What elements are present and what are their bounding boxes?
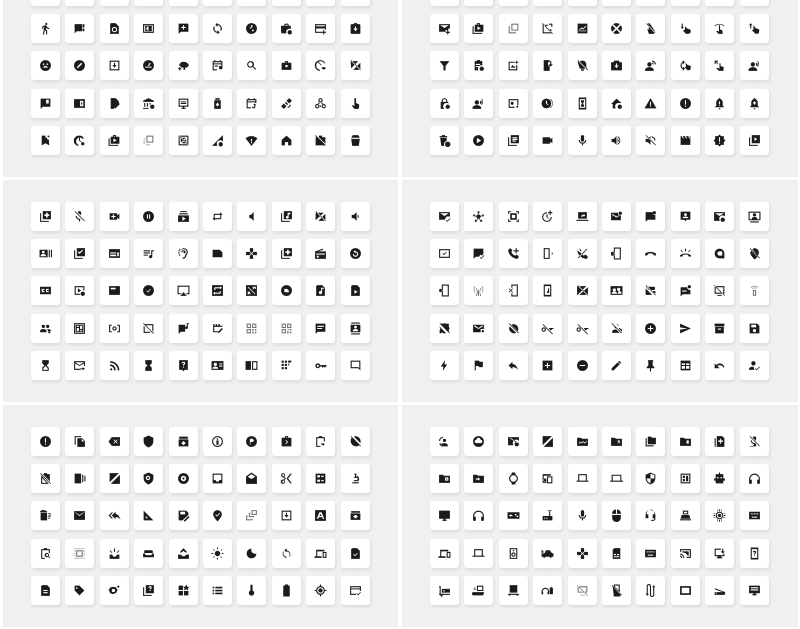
panel: icons set 3 xyxy=(3,180,398,402)
icon: document play xyxy=(341,276,370,305)
icon: replay circle xyxy=(341,239,370,268)
icon: folder badge xyxy=(671,427,700,456)
icon: microscope xyxy=(341,464,370,493)
icon: add circle xyxy=(636,314,665,343)
icon: error xyxy=(31,427,60,456)
panel: icons set 5 xyxy=(3,405,398,627)
icon: laptop share xyxy=(568,202,597,231)
icon: mobile off xyxy=(602,576,631,605)
icon: monitor contrast xyxy=(134,14,163,43)
icon: my location xyxy=(306,576,335,605)
icon: mail notification xyxy=(602,202,631,231)
icon: folder arrow xyxy=(464,464,493,493)
icon: clipboard arrow xyxy=(306,427,335,456)
icon: circle arrow xyxy=(272,276,301,305)
icon: smart toy xyxy=(705,464,734,493)
icon: camera switch person xyxy=(430,427,459,456)
icon: call end xyxy=(636,239,665,268)
icon: battery xyxy=(272,576,301,605)
icon: clapper edit xyxy=(203,314,232,343)
icon: radio tower xyxy=(464,276,493,305)
icon: person waves xyxy=(636,51,665,80)
icon: calendar repeat xyxy=(237,89,266,118)
icon: person voice xyxy=(464,89,493,118)
icon: swipe vertical xyxy=(740,14,769,43)
icon: phone gear xyxy=(430,276,459,305)
icon: gear sparkle xyxy=(100,576,129,605)
icon: send xyxy=(671,314,700,343)
icon: toy car xyxy=(533,539,562,568)
icon: download box xyxy=(272,501,301,530)
icon: bell alert xyxy=(705,89,734,118)
icon: hourglass full xyxy=(134,351,163,380)
icon: headset xyxy=(464,501,493,530)
icon: folder chart xyxy=(568,427,597,456)
icon: error xyxy=(671,89,700,118)
icon: globe xyxy=(237,14,266,43)
icon: photo frame spark xyxy=(499,89,528,118)
icon: fullscreen frame xyxy=(499,202,528,231)
icon: phone exit xyxy=(602,239,631,268)
icon: inventory box xyxy=(169,427,198,456)
icon: mic off xyxy=(65,202,94,231)
icon: person check xyxy=(740,351,769,380)
icon: duo xyxy=(705,239,734,268)
icon: video settings xyxy=(65,276,94,305)
icon: key xyxy=(306,351,335,380)
icon: dialpad xyxy=(272,351,301,380)
icon: chat check xyxy=(464,239,493,268)
icon: person voice xyxy=(740,51,769,80)
icon: mail dot xyxy=(464,314,493,343)
icon: push pin xyxy=(636,351,665,380)
icon: file copy xyxy=(65,427,94,456)
icon: mic xyxy=(568,501,597,530)
icon: screen off xyxy=(568,276,597,305)
icon: laptop wide xyxy=(602,464,631,493)
icon: repeat xyxy=(203,202,232,231)
icon: library add xyxy=(31,202,60,231)
icon: crop off xyxy=(533,14,562,43)
icon: work with gear xyxy=(272,14,301,43)
icon: email xyxy=(65,501,94,530)
icon: watch xyxy=(499,464,528,493)
icon: book xyxy=(237,351,266,380)
icon: search xyxy=(237,51,266,80)
icon: urn xyxy=(341,126,370,155)
panel: icons set 2 xyxy=(402,0,798,177)
icon: folder number xyxy=(602,427,631,456)
icon: shield xyxy=(134,427,163,456)
icon: home xyxy=(272,126,301,155)
icon: movie xyxy=(671,126,700,155)
icon: work arrow xyxy=(272,427,301,456)
icon: location check xyxy=(203,501,232,530)
icon: folders xyxy=(636,427,665,456)
icon: phone side xyxy=(65,464,94,493)
icon: phone off xyxy=(568,239,597,268)
icon: tray triangle xyxy=(169,539,198,568)
icon: open mail xyxy=(237,464,266,493)
icon: circle off xyxy=(341,427,370,456)
icon: folder badge xyxy=(430,464,459,493)
icon: gauge eye xyxy=(306,51,335,80)
icon: braces camera xyxy=(100,314,129,343)
icon: hub xyxy=(464,202,493,231)
icon: swipe up xyxy=(705,14,734,43)
icon: speed gauge xyxy=(134,51,163,80)
icon: cloud circle xyxy=(464,427,493,456)
icon: circle check xyxy=(134,276,163,305)
icon: list xyxy=(203,576,232,605)
icon: cable xyxy=(636,576,665,605)
icon: disc xyxy=(169,464,198,493)
icon: ring volume xyxy=(671,239,700,268)
icon: loop xyxy=(272,539,301,568)
icon: camera download xyxy=(602,51,631,80)
icon: save edit xyxy=(169,501,198,530)
icon: videocam xyxy=(533,126,562,155)
icon: chat image xyxy=(671,276,700,305)
icon: analytics xyxy=(568,14,597,43)
icon: reply all xyxy=(100,501,129,530)
icon: bookmark flag xyxy=(31,126,60,155)
icon: image slash xyxy=(533,427,562,456)
icon: headphones xyxy=(740,464,769,493)
icon: tablet xyxy=(671,576,700,605)
cropped top tile row xyxy=(31,0,372,8)
icon: sofa xyxy=(134,539,163,568)
icon: phone audio xyxy=(533,276,562,305)
icon: event repeat xyxy=(203,51,232,80)
icon: set square xyxy=(134,501,163,530)
icon: reply xyxy=(499,351,528,380)
icon: remote wifi xyxy=(740,276,769,305)
icon: gamepad xyxy=(568,539,597,568)
icon: inbox xyxy=(203,464,232,493)
icon: flag circle xyxy=(237,427,266,456)
icon: stacked images xyxy=(237,501,266,530)
icon: router xyxy=(533,501,562,530)
icon: security search xyxy=(134,464,163,493)
icon: desktop off xyxy=(568,576,597,605)
icon: mail add xyxy=(430,14,459,43)
icon: clock arc xyxy=(533,89,562,118)
icon: cast connected xyxy=(671,539,700,568)
icon: phone question xyxy=(740,539,769,568)
icon: laptop xyxy=(568,464,597,493)
icon: work play stack xyxy=(464,14,493,43)
icon: tag xyxy=(65,576,94,605)
icon: bottle xyxy=(203,89,232,118)
icon: radio xyxy=(306,239,335,268)
icon: table view xyxy=(671,351,700,380)
icon: swipe down xyxy=(671,14,700,43)
icon: contact video xyxy=(602,276,631,305)
icon: chat outline xyxy=(341,351,370,380)
icon: moon xyxy=(237,539,266,568)
icon: library check xyxy=(65,239,94,268)
icon: calendar check xyxy=(430,239,459,268)
icon: filter xyxy=(430,51,459,80)
panel: icons set 6 xyxy=(402,405,798,627)
icon: circle pen xyxy=(65,51,94,80)
icon: chip grid xyxy=(671,464,700,493)
icon: person off xyxy=(602,314,631,343)
icon: shuffle on xyxy=(237,276,266,305)
icon: devices xyxy=(306,539,335,568)
icon: wifi alert xyxy=(237,126,266,155)
icon: edit xyxy=(602,351,631,380)
icon: video library xyxy=(740,126,769,155)
icon: cloud add xyxy=(169,51,198,80)
icon: rotate hand xyxy=(671,51,700,80)
icon: alarm off xyxy=(499,314,528,343)
icon: library books xyxy=(499,126,528,155)
icon: mail send xyxy=(65,351,94,380)
icon: description xyxy=(31,576,60,605)
icon: warning xyxy=(636,89,665,118)
icon: document check xyxy=(341,539,370,568)
icon: rss feed xyxy=(100,351,129,380)
icon: signal gear xyxy=(203,126,232,155)
icon: newspaper panel xyxy=(65,89,94,118)
icon: delete clock xyxy=(430,126,459,155)
icon: running person xyxy=(31,14,60,43)
icon: play circle xyxy=(464,126,493,155)
icon: quiz xyxy=(134,576,163,605)
icon: flag xyxy=(464,351,493,380)
icon: keyboard xyxy=(636,539,665,568)
icon: save xyxy=(740,314,769,343)
panel: icons set 1 xyxy=(3,0,398,177)
icon: repeat on xyxy=(203,276,232,305)
icon: scanner xyxy=(464,576,493,605)
icon: lock gear xyxy=(430,89,459,118)
icon: clock gear xyxy=(65,126,94,155)
icon: phone hourglass xyxy=(568,89,597,118)
icon: volume down xyxy=(341,202,370,231)
icon: medical box xyxy=(341,501,370,530)
icon: presenter xyxy=(740,202,769,231)
icon: chat notification xyxy=(636,202,665,231)
icon: phone close xyxy=(499,276,528,305)
icon: work off xyxy=(306,126,335,155)
icon: undo xyxy=(705,351,734,380)
icon: devices xyxy=(430,539,459,568)
icon: qr code xyxy=(237,314,266,343)
icon: sim card refresh xyxy=(100,14,129,43)
icon: image off xyxy=(341,51,370,80)
icon: briefcase xyxy=(272,51,301,80)
icon: question bubble xyxy=(169,351,198,380)
icon: bell add xyxy=(740,89,769,118)
icon: add to photos xyxy=(272,239,301,268)
icon: game controller xyxy=(499,501,528,530)
icon: headphones battery xyxy=(533,576,562,605)
icon: stop screen xyxy=(705,276,734,305)
icon: image slash xyxy=(100,464,129,493)
icon: cart xyxy=(430,576,459,605)
icon: list panels xyxy=(306,464,335,493)
icon: bank gear xyxy=(134,89,163,118)
icon: brightness xyxy=(203,539,232,568)
icon: add box xyxy=(533,351,562,380)
icon: frame off xyxy=(169,126,198,155)
icon: document edit xyxy=(100,89,129,118)
icon: webhook xyxy=(306,89,335,118)
icon: meeting off xyxy=(636,276,665,305)
icon: assignment gear xyxy=(464,51,493,80)
icon: subscriptions xyxy=(169,202,198,231)
icon: pause circle xyxy=(134,202,163,231)
icon: tv xyxy=(430,501,459,530)
icon: volume mute xyxy=(237,202,266,231)
icon: hearing xyxy=(169,239,198,268)
icon: bell off xyxy=(568,51,597,80)
icon: qr code dense xyxy=(272,314,301,343)
icon: letter A box xyxy=(306,501,335,530)
icon: scissors xyxy=(272,464,301,493)
icon: person bubble xyxy=(671,202,700,231)
icon: headset mic xyxy=(636,501,665,530)
icon: key off xyxy=(533,314,562,343)
icon: assignment search xyxy=(31,539,60,568)
icon: pinch hand xyxy=(705,51,734,80)
icon: bolt xyxy=(430,351,459,380)
icon: closed captions xyxy=(31,276,60,305)
icon: flip to front xyxy=(134,126,163,155)
icon: framed tiles xyxy=(65,314,94,343)
icon: tap off xyxy=(636,14,665,43)
icon: groups xyxy=(31,314,60,343)
cropped top tile row xyxy=(430,0,770,8)
icon: mail off gear xyxy=(499,427,528,456)
icon: video off xyxy=(306,202,335,231)
icon: backspace xyxy=(100,427,129,456)
icon: photo spark xyxy=(499,51,528,80)
icon: flatbed scanner xyxy=(705,576,734,605)
icon: tab window xyxy=(100,276,129,305)
icon: apps star xyxy=(169,576,198,605)
icon: add call xyxy=(499,239,528,268)
icon: chat with side panel xyxy=(65,14,94,43)
icon: satellite xyxy=(272,89,301,118)
icon: chip circle xyxy=(705,501,734,530)
icon: install desktop xyxy=(705,539,734,568)
icon: mouse xyxy=(602,501,631,530)
icon: circle cross xyxy=(602,14,631,43)
icon: recent actors xyxy=(31,239,60,268)
icon: library music xyxy=(272,202,301,231)
icon: queue music xyxy=(134,239,163,268)
icon: medical bag download xyxy=(341,14,370,43)
icon: note xyxy=(203,239,232,268)
icon: circle person xyxy=(203,427,232,456)
icon: delete list xyxy=(31,501,60,530)
icon: memory chip xyxy=(65,539,94,568)
icon: music document xyxy=(306,276,335,305)
icon: house gear xyxy=(602,89,631,118)
icon: thermometer xyxy=(237,576,266,605)
icon: video add xyxy=(100,202,129,231)
icon: chat xyxy=(306,314,335,343)
icon: touch app xyxy=(341,89,370,118)
icon: no video outline xyxy=(134,314,163,343)
icon: sad face xyxy=(31,51,60,80)
icon: card check xyxy=(341,576,370,605)
icon: download box xyxy=(100,51,129,80)
icon: monitor message xyxy=(169,89,198,118)
icon: phone vibrate xyxy=(533,239,562,268)
icon: gamepad xyxy=(237,239,266,268)
icon: speaker xyxy=(499,539,528,568)
icon: monitor xyxy=(740,576,769,605)
icon: phone download xyxy=(533,51,562,80)
icon: security xyxy=(636,464,665,493)
icon: mail check xyxy=(430,202,459,231)
icon: chat flag xyxy=(31,89,60,118)
icon: clipboard off xyxy=(31,464,60,493)
panel: icons set 4 xyxy=(402,180,798,402)
icon: message add xyxy=(169,14,198,43)
icon: archive xyxy=(705,314,734,343)
icon: clock add xyxy=(533,202,562,231)
icon: work play xyxy=(100,126,129,155)
icon: new releases xyxy=(705,126,734,155)
icon: mail gear xyxy=(705,202,734,231)
icon: laptop xyxy=(464,539,493,568)
icon: web browser xyxy=(100,239,129,268)
icon: add card xyxy=(306,14,335,43)
icon: flip to back xyxy=(499,14,528,43)
icon: volume off xyxy=(636,126,665,155)
icon: wake tray xyxy=(100,539,129,568)
icon: remove circle xyxy=(568,351,597,380)
icon: mic xyxy=(568,126,597,155)
icon: chat music xyxy=(169,314,198,343)
icon: devices speaker xyxy=(533,464,562,493)
icon: airplay xyxy=(169,276,198,305)
icon: sim card xyxy=(602,539,631,568)
icon: location off xyxy=(740,239,769,268)
icon: printer xyxy=(671,501,700,530)
icon: hourglass top xyxy=(31,351,60,380)
icon: mic off light xyxy=(740,427,769,456)
icon: sync xyxy=(203,14,232,43)
icon: extension off xyxy=(430,314,459,343)
icon: keyboard dark xyxy=(740,501,769,530)
icon: key off xyxy=(568,314,597,343)
icon: contact card xyxy=(203,351,232,380)
icon: stacked document add xyxy=(705,427,734,456)
icon: contacts xyxy=(341,314,370,343)
icon: computer xyxy=(499,576,528,605)
icon: volume up xyxy=(602,126,631,155)
